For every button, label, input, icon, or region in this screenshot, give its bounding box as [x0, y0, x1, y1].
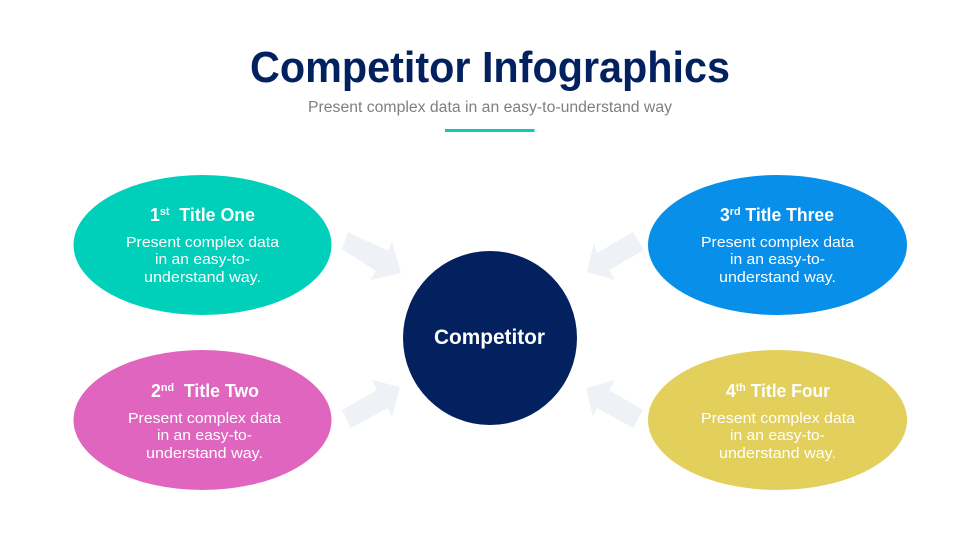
panel: 2nd title two — [74, 350, 332, 490]
heading: 1st title one: st — [160, 206, 170, 218]
text block: 3rd description — [701, 235, 855, 286]
text block: 3rd description: Present complex data — [701, 235, 855, 251]
heading: 4th title four: 4 — [726, 381, 736, 401]
text block: 3rd description: in an easy-to- — [730, 252, 825, 268]
text block: 1st description: understand way. — [144, 270, 261, 286]
heading: 3rd title three: rd — [730, 206, 741, 218]
center circle: competitor — [403, 251, 577, 425]
text block: 2nd description — [128, 411, 282, 462]
center circle: competitor: Competitor — [434, 326, 545, 349]
title: Competitor Infographics — [250, 43, 730, 92]
panel: 4th title four — [648, 350, 907, 490]
heading: 1st title one: 1 — [150, 205, 160, 225]
text block: 4th description: in an easy-to- — [730, 428, 825, 444]
text block: 2nd description: Present complex data — [128, 411, 282, 427]
heading: 1st title one: Title One — [170, 205, 255, 225]
title accent line — [445, 129, 534, 132]
text block: 1st description — [126, 235, 280, 286]
arrow: bottom right — [586, 380, 643, 428]
panel: 3rd title three — [648, 175, 907, 315]
arrow: bottom left — [342, 380, 400, 428]
heading: 4th title four: Title Four — [746, 381, 830, 401]
arrow: top right — [587, 232, 644, 280]
text block: 4th description — [701, 411, 856, 462]
text block: 1st description: in an easy-to- — [155, 252, 250, 268]
heading: 2nd title two: Title Two — [174, 381, 259, 401]
heading: 2nd title two: 2 — [151, 381, 161, 401]
text block: 1st description: Present complex data — [126, 235, 280, 251]
text block: 2nd description: in an easy-to- — [157, 428, 252, 444]
text block: 3rd description: understand way. — [719, 270, 836, 286]
heading: 2nd title two: nd — [161, 382, 174, 394]
text block: 4th description: understand way. — [719, 446, 836, 462]
subtitle: Present complex data in an easy-to-understand way — [308, 99, 672, 116]
text block: 4th description: Present complex data — [701, 411, 856, 427]
arrow: top left — [342, 232, 401, 280]
text block: 2nd description: understand way. — [146, 446, 263, 462]
heading: 3rd title three: Title Three — [741, 205, 834, 225]
heading: 4th title four: th — [736, 382, 746, 394]
panel: 1st title one — [74, 175, 332, 315]
heading: 3rd title three: 3 — [720, 205, 730, 225]
